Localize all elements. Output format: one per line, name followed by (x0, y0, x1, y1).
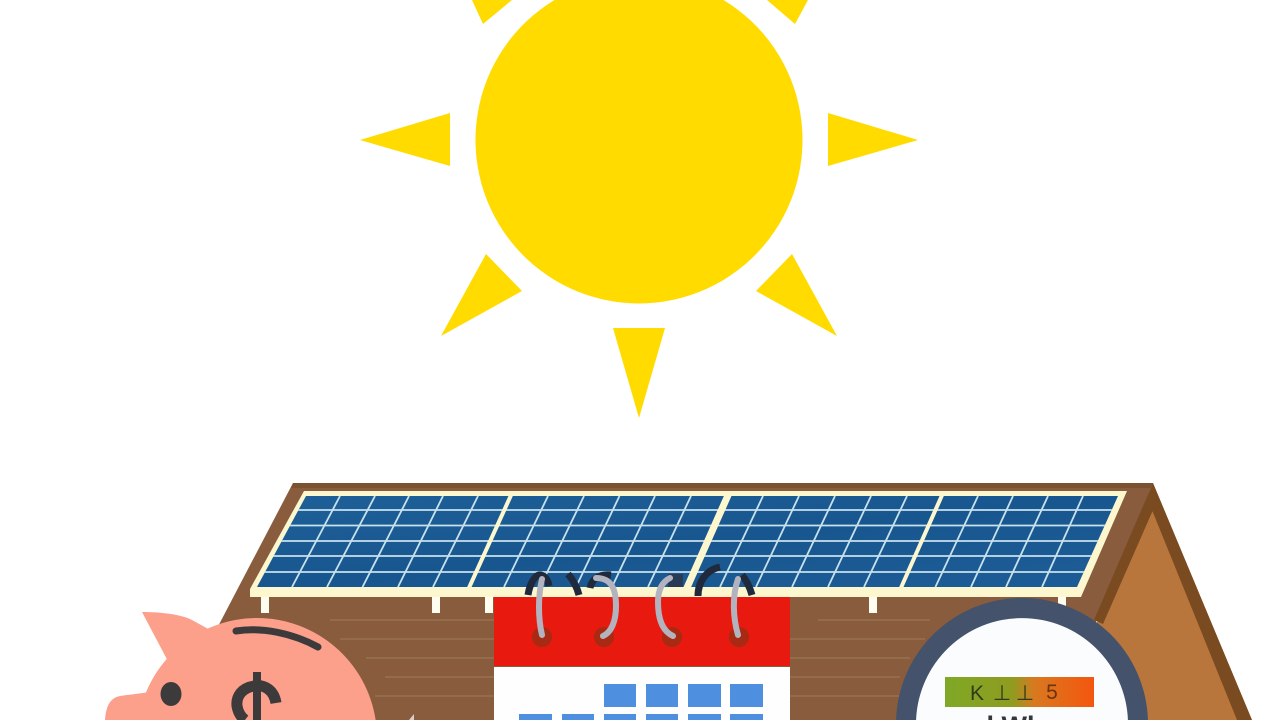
panel legs (261, 596, 1066, 613)
dollar sign (237, 672, 276, 720)
pig ear (142, 612, 210, 665)
solar panel array (240, 491, 1130, 613)
meter face (916, 618, 1128, 720)
meter digits: 5 (1046, 681, 1058, 704)
meter digits: ⊥ (993, 682, 1011, 705)
pig snout (105, 692, 170, 720)
gable outer edge (1152, 483, 1252, 720)
icon: sun (360, 0, 918, 418)
meter bezel (896, 598, 1148, 720)
calendar binding holes (532, 627, 749, 647)
coin slot (236, 630, 318, 647)
meter display (945, 677, 1094, 707)
panel dividers (468, 493, 943, 590)
icon: electricity meter (896, 598, 1148, 720)
house roof (190, 483, 1252, 720)
calendar page (494, 667, 790, 720)
sun rays (360, 0, 918, 418)
roof edge strip (1094, 483, 1153, 624)
panel frame (250, 491, 1127, 597)
pig body (138, 618, 376, 720)
small highlight mark (409, 714, 414, 720)
panel cells (257, 496, 1118, 587)
meter digits (970, 681, 1058, 705)
calendar header (494, 597, 790, 666)
roof front (190, 483, 1153, 720)
binding rings (539, 578, 738, 636)
pig eye (160, 682, 182, 706)
calendar date squares (519, 684, 763, 720)
icon: calendar (494, 567, 790, 720)
sun disc (476, 0, 802, 303)
meter digits: K (970, 682, 984, 705)
meter digits: ⊥ (1016, 682, 1034, 705)
gable side wall (1090, 483, 1252, 720)
binding ring backs (528, 567, 752, 596)
icon: piggy bank (105, 612, 414, 720)
